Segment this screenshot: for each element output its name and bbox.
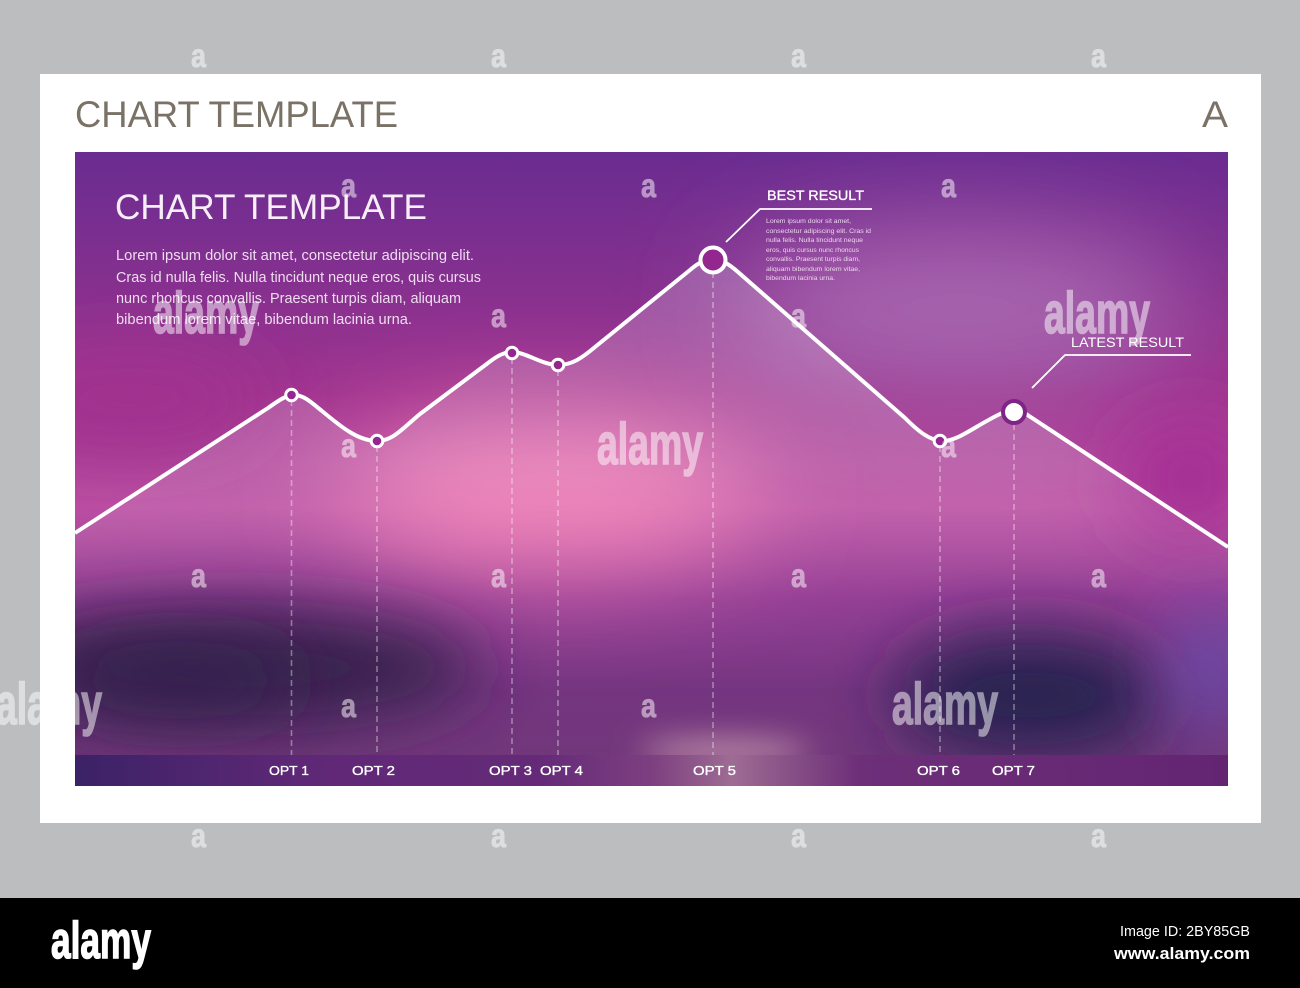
- watermark marks: a: [791, 817, 807, 854]
- watermark marks: a: [1091, 557, 1107, 594]
- axis labels: OPT 6: [917, 763, 960, 778]
- axis labels: OPT 2: [352, 763, 395, 778]
- chart description: [116, 248, 481, 328]
- axis labels: OPT 1: [269, 763, 309, 778]
- watermark marks: a: [941, 167, 957, 204]
- watermark marks: alamy: [153, 281, 259, 346]
- axis labels: OPT 5: [693, 763, 736, 778]
- watermark marks: a: [191, 37, 207, 74]
- axis labels: OPT 7: [992, 763, 1035, 778]
- watermark marks: alamy: [597, 412, 703, 477]
- watermark marks: a: [491, 297, 507, 334]
- watermark marks: a: [1091, 37, 1107, 74]
- callout: best result: convallis. Praesent turpis diam,: [766, 256, 860, 263]
- watermark marks: a: [491, 817, 507, 854]
- watermark marks: a: [341, 687, 357, 724]
- watermark marks: alamy: [1044, 281, 1150, 346]
- watermark marks: a: [641, 167, 657, 204]
- watermark marks: alamy: [0, 672, 102, 737]
- watermark marks: a: [791, 557, 807, 594]
- watermark marks: a: [491, 557, 507, 594]
- footer image id: Image ID: 2BY85GB: [1120, 923, 1250, 940]
- callout: best result: BEST RESULT: [767, 188, 864, 203]
- watermark marks: a: [791, 37, 807, 74]
- watermark marks: a: [191, 817, 207, 854]
- axis labels: OPT 3: [489, 763, 532, 778]
- callout: best result: [726, 188, 872, 282]
- chart description: Cras id nulla felis. Nulla tincidunt neque eros, quis cursus: [116, 270, 481, 286]
- best result marker: [700, 248, 726, 272]
- callout: best result: nulla felis. Nulla tincidunt neque: [766, 237, 863, 244]
- watermark marks: a: [641, 687, 657, 724]
- callout: best result: aliquam bibendum lorem vitae,: [766, 266, 860, 273]
- watermark marks: a: [491, 37, 507, 74]
- callout: latest result: [1032, 335, 1191, 388]
- watermark marks: a: [341, 167, 357, 204]
- chart description: nunc rhoncus convallis. Praesent turpis diam, aliquam: [116, 291, 461, 307]
- watermark marks: a: [941, 427, 957, 464]
- callout: latest result: LATEST RESULT: [1071, 335, 1184, 350]
- callout: best result: consectetur adipiscing elit. Cras id: [766, 228, 871, 235]
- axis labels: [269, 763, 1035, 778]
- data markers: [286, 347, 946, 447]
- axis labels: OPT 4: [540, 763, 583, 778]
- callout: best result: eros, quis cursus nunc rhoncus: [766, 247, 860, 254]
- chart description: bibendum lorem vitae, bibendum lacinia urna.: [116, 312, 412, 328]
- watermark marks: a: [791, 297, 807, 334]
- bottom label band: [75, 755, 1228, 786]
- footer url: www.alamy.com: [1113, 944, 1250, 963]
- drop lines: [292, 272, 1014, 755]
- panel: blurred gradient chart background: [75, 152, 1228, 755]
- chart heading: CHART TEMPLATE: [115, 188, 427, 227]
- chart description: Lorem ipsum dolor sit amet, consectetur adipiscing elit.: [116, 248, 474, 264]
- footer logo: alamy: [51, 912, 151, 970]
- watermark marks: [0, 37, 1150, 854]
- callout: best result: Lorem ipsum dolor sit amet,: [766, 218, 851, 225]
- line chart: [75, 259, 1228, 547]
- watermark marks: a: [1091, 817, 1107, 854]
- slide title: CHART TEMPLATE: [75, 94, 398, 135]
- watermark marks: a: [191, 557, 207, 594]
- white slide card: [40, 74, 1261, 823]
- footer bar: [0, 898, 1300, 988]
- latest result marker: [1003, 401, 1025, 423]
- callout: best result: bibendum lacinia urna.: [766, 275, 835, 282]
- area under the line: [75, 266, 1228, 562]
- watermark marks: alamy: [892, 672, 998, 737]
- watermark marks: a: [341, 427, 357, 464]
- slide letter: A: [1202, 94, 1228, 135]
